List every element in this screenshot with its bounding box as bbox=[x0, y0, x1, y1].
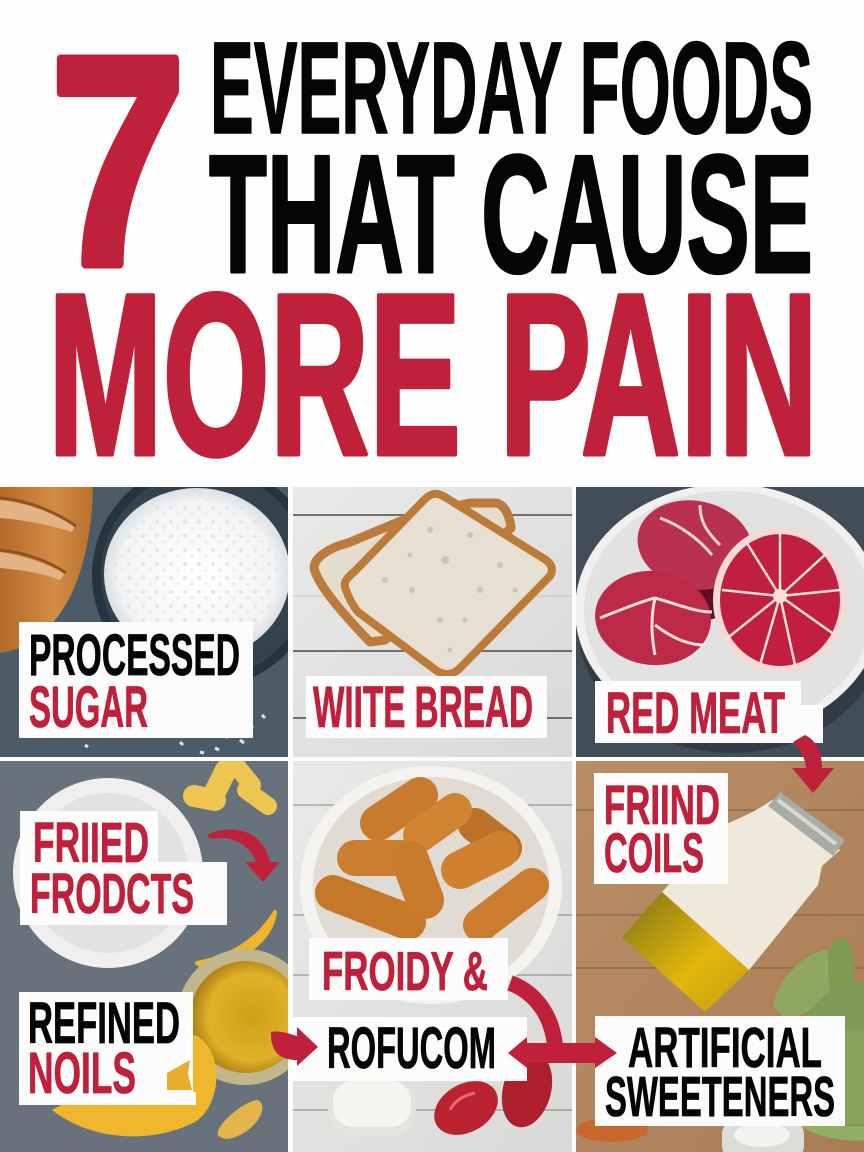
label text: friind: FRIIND bbox=[604, 773, 720, 836]
panel: fried products bbox=[0, 761, 313, 1152]
label text: refined: REFINED bbox=[28, 991, 180, 1056]
photo: oil jar and leaves on wood bbox=[576, 761, 864, 1152]
label text: processed: PROCESSED bbox=[29, 623, 240, 688]
label text: white bread: WIITE BREAD bbox=[313, 675, 533, 740]
label: white bread bbox=[306, 675, 547, 740]
label: red meat bbox=[595, 681, 823, 746]
label text: sugar: SUGAR bbox=[29, 675, 148, 740]
label: refined oils bbox=[19, 991, 196, 1106]
label text: products: FRODCTS bbox=[30, 862, 194, 926]
panel: white bread bbox=[293, 487, 572, 757]
arrow: curved froidy connector bbox=[510, 983, 555, 1046]
panel: artificial sweeteners bbox=[576, 761, 864, 1152]
label text: rofucom: ROFUCOM bbox=[327, 1016, 496, 1081]
arrow: fried products curved bbox=[207, 830, 280, 882]
label: froidy and bbox=[309, 938, 508, 1002]
photo: fried sticks on plate bbox=[293, 761, 572, 1152]
label text: froidy: FROIDY & bbox=[322, 940, 488, 1002]
arrow: red meat to oils bbox=[792, 735, 834, 793]
panel: processed sugar bbox=[0, 487, 288, 757]
label text: fried: FRIIED bbox=[33, 811, 149, 875]
label text: coils: COILS bbox=[604, 821, 704, 884]
photo: bread and sugar bowl bbox=[0, 487, 288, 757]
label: rofucom bbox=[293, 1016, 527, 1081]
title bbox=[48, 0, 818, 503]
panel: fried dough bbox=[293, 761, 572, 1152]
photo: bread slices on wood bbox=[293, 487, 572, 757]
arrow: oils to rofucom bbox=[271, 1027, 318, 1066]
label: artificial sweeteners bbox=[595, 1016, 845, 1129]
label: fried products bbox=[20, 811, 227, 926]
label text: oils: NOILS bbox=[28, 1041, 136, 1106]
panel: red meat bbox=[575, 484, 864, 757]
label: friind coils bbox=[594, 773, 728, 884]
title: numeral 7: 7 bbox=[50, 0, 186, 328]
label: processed sugar bbox=[19, 622, 253, 740]
photo: plate, snacks and oil bowl bbox=[0, 761, 313, 1152]
arrow: double headed bbox=[508, 1037, 617, 1068]
photo: red meat on plate bbox=[575, 484, 864, 757]
